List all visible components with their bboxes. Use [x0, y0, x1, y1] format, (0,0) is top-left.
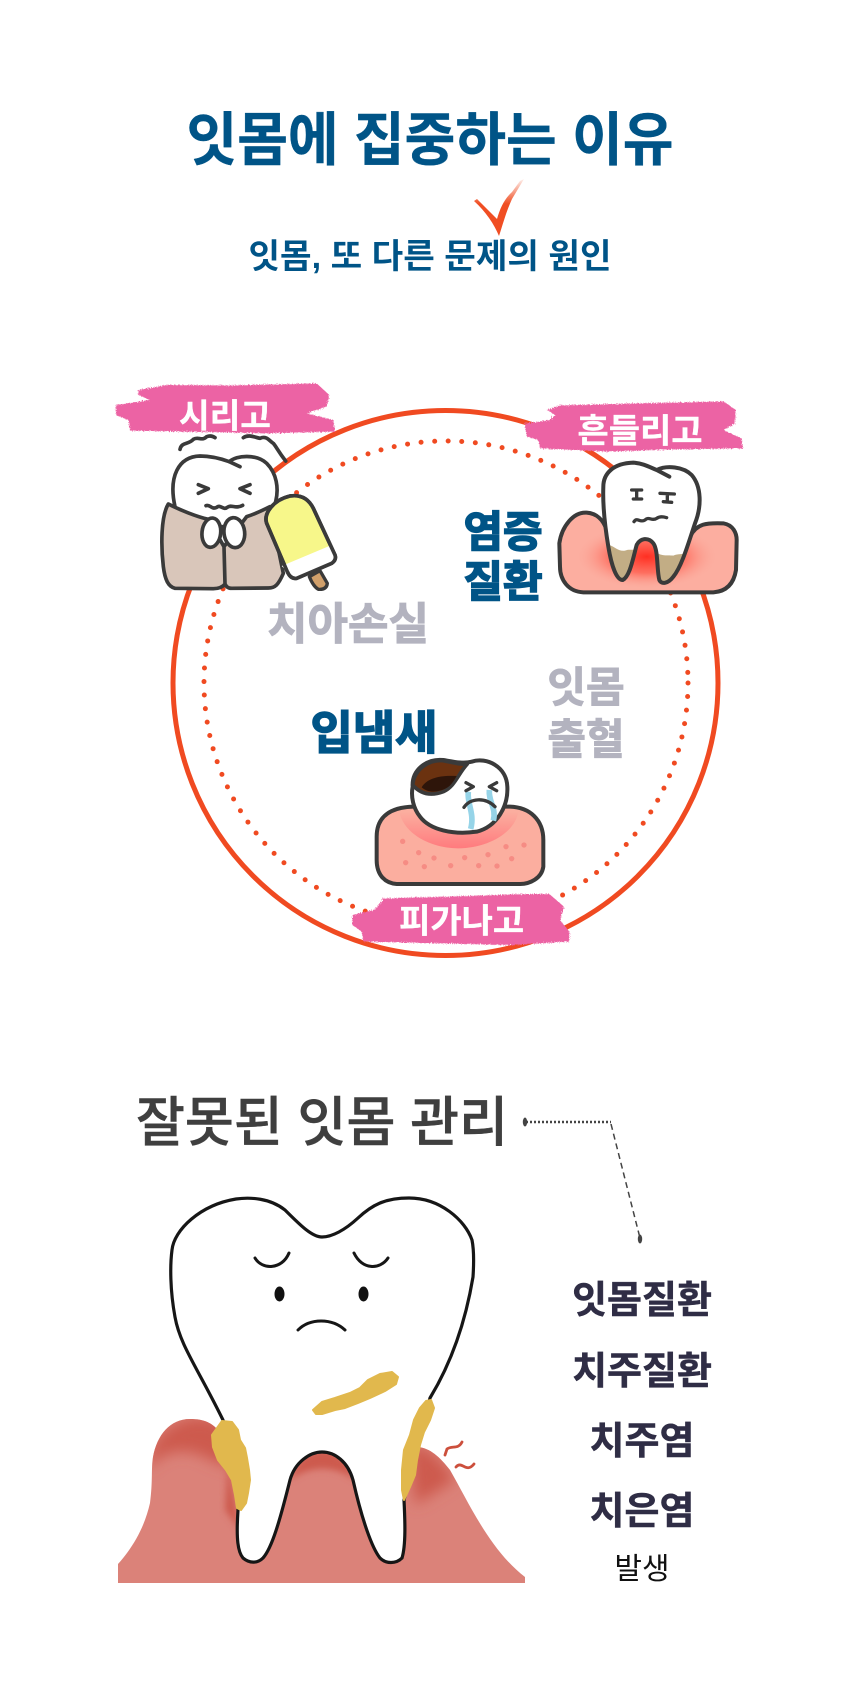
- illustration: tooth with plaque and gum disease: [118, 1198, 525, 1583]
- item: 치주질환: [572, 1351, 712, 1393]
- gum: [377, 807, 543, 884]
- tears: [468, 790, 494, 829]
- item: 잇몸질환: [572, 1280, 712, 1322]
- label: 흔들리고: 흔들리고: [577, 414, 702, 451]
- brush label background: [116, 383, 335, 433]
- shivering hair lines: [180, 436, 286, 461]
- decay: [413, 761, 467, 794]
- title: 잇몸에 집중하는 이유: [186, 108, 674, 173]
- exposed root tartar: [609, 545, 686, 582]
- illustration: loose tooth with inflamed gum: [525, 401, 743, 592]
- popsicle: [266, 496, 335, 578]
- label: 치아손실: 치아손실: [267, 600, 429, 649]
- label: 시리고: 시리고: [179, 398, 271, 435]
- brush label background: [525, 401, 743, 452]
- gum: [559, 513, 737, 592]
- gum dots: [400, 839, 527, 869]
- illustration: sensitive tooth with popsicle: [116, 383, 335, 589]
- dotted leader arrow: [523, 1118, 642, 1244]
- illustration: decayed crying tooth: [352, 760, 569, 945]
- label: 잇몸 출혈: 잇몸: [547, 664, 625, 711]
- tooth: [171, 1198, 474, 1562]
- caption: 발생: [614, 1553, 670, 1586]
- face: [464, 783, 497, 807]
- label: 피가나고: 피가나고: [399, 903, 524, 940]
- heading: wrong gum care: 잘못된 잇몸 관리: [136, 1093, 508, 1153]
- label: 염증 질환: 염증: [463, 509, 543, 557]
- tooth outline: [603, 463, 700, 583]
- plaque: [212, 1372, 434, 1510]
- gum: [118, 1419, 525, 1583]
- icon: red check mark: [474, 179, 524, 236]
- face: [198, 485, 250, 508]
- item: 치주염: [590, 1421, 694, 1463]
- diagram: gum problems cycle: [116, 383, 743, 955]
- tooth: [173, 456, 277, 527]
- brush label background: [352, 894, 569, 945]
- label: 입냄새: 입냄새: [311, 707, 437, 759]
- tooth: [412, 760, 507, 833]
- outer circle: [173, 410, 718, 956]
- tooth: [603, 463, 700, 583]
- subtitle: 잇몸, 또 다른 문제의 원인: [248, 238, 612, 276]
- list of gum diseases: [572, 1280, 712, 1586]
- label: 잇몸 출혈: 출혈: [547, 716, 625, 763]
- dotted inner circle: [204, 441, 688, 925]
- face: [255, 1253, 388, 1330]
- inflamed crescent: [399, 812, 518, 848]
- gum redness: [145, 1417, 455, 1530]
- item: 치은염: [590, 1491, 694, 1533]
- label: 염증 질환: 질환: [463, 559, 543, 607]
- inflammation glow: [575, 524, 718, 589]
- popsicle stick: [309, 571, 327, 589]
- pain squiggles: [445, 1442, 474, 1468]
- face: [632, 490, 674, 522]
- coat: [162, 504, 283, 589]
- hands: [201, 517, 222, 548]
